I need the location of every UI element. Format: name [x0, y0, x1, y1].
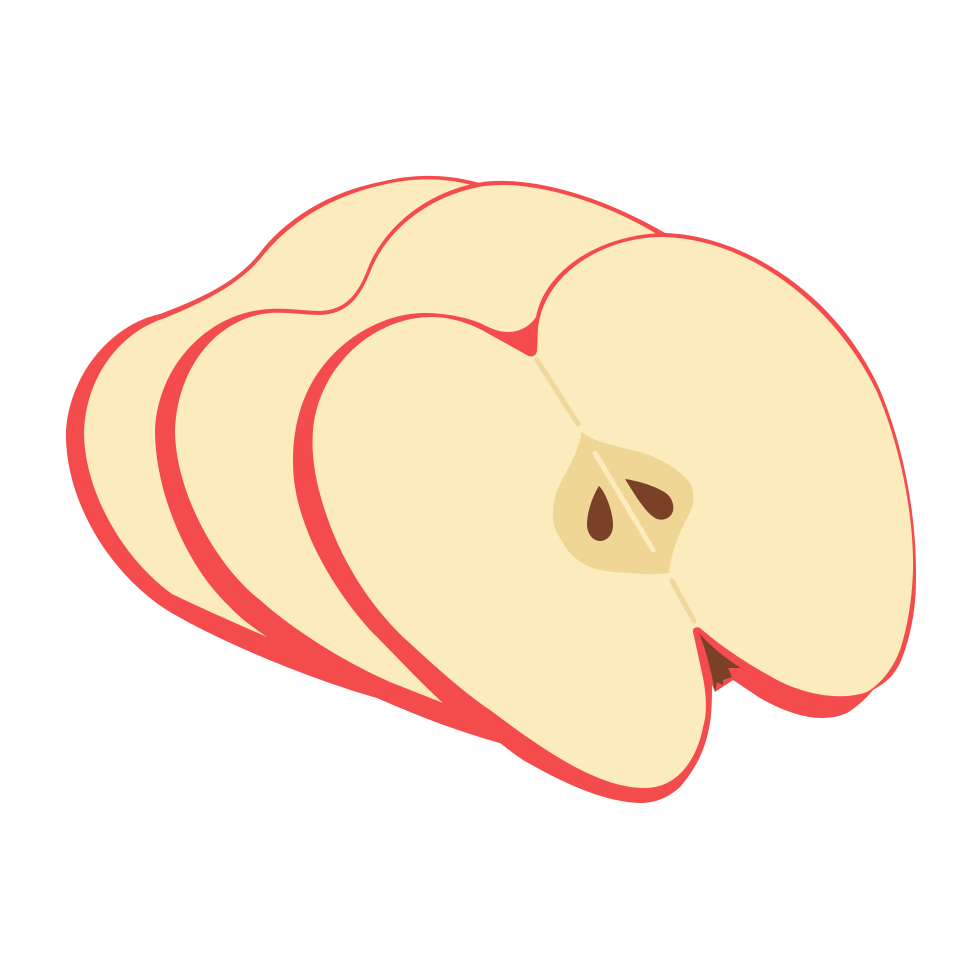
- seed right: [625, 479, 673, 520]
- core highlight line: [595, 453, 653, 550]
- front slice flesh: [313, 237, 913, 788]
- front apple slice: [293, 233, 916, 803]
- middle apple slice: [155, 181, 700, 743]
- core: [553, 432, 693, 574]
- middle slice flesh: [175, 185, 700, 703]
- front slice skin: [293, 233, 916, 803]
- stem end: [699, 633, 741, 692]
- back apple slice: [66, 176, 600, 743]
- middle slice skin: [155, 181, 700, 743]
- core vein top: [537, 360, 578, 424]
- seed left: [587, 486, 613, 541]
- back slice flesh: [84, 179, 500, 637]
- back slice skin: [66, 176, 600, 743]
- core vein bottom: [672, 581, 694, 621]
